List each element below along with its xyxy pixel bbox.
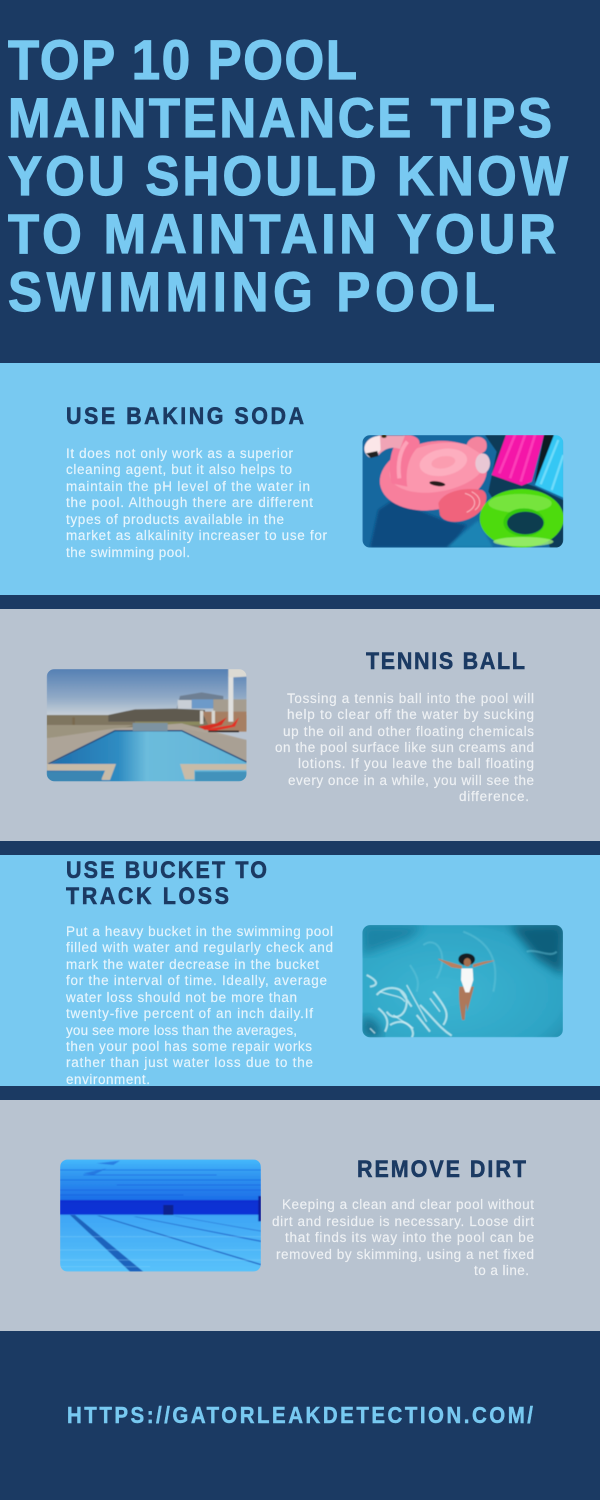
text block: bucket: filled with water and regularly check and — [66, 940, 333, 955]
text block: remove dirt: that finds its way into the pool can be — [285, 1230, 534, 1245]
text block: remove dirt: dirt and residue is necessary. Loose dirt — [272, 1214, 534, 1229]
text block: baking soda: the pool. Although there are different — [66, 495, 313, 510]
text block: bucket: twenty-five percent of an inch daily.If — [66, 1006, 313, 1021]
text block: tennis ball: help to clear off the water by sucking — [287, 707, 534, 722]
panel: remove dirt — [0, 1100, 600, 1331]
title: MAINTENANCE TIPS — [8, 87, 552, 150]
text block: bucket: you see more loss than the averages, — [66, 1023, 297, 1038]
text block: tennis ball: difference. — [459, 789, 529, 804]
text block: remove dirt: to a line. — [474, 1263, 529, 1278]
heading: use bucket to track loss: TRACK LOSS — [66, 882, 229, 909]
heading: use bucket to track loss: USE BUCKET TO — [66, 856, 267, 883]
website url: HTTPS://GATORLEAKDETECTION.COM/ — [67, 1402, 533, 1428]
text block: remove dirt — [272, 1197, 534, 1278]
text block: baking soda: the swimming pool. — [66, 545, 190, 560]
title: TO MAINTAIN YOUR — [8, 203, 556, 266]
text block: tennis ball: lotions. If you leave the ball floating — [298, 756, 534, 771]
text block: tennis ball: Tossing a tennis ball into the pool will — [287, 691, 534, 706]
heading: remove dirt: REMOVE DIRT — [357, 1155, 526, 1182]
text block: tennis ball: on the pool surface like sun creams and — [275, 740, 534, 755]
text block: tennis ball: up the oil and other floating chemicals — [283, 724, 534, 739]
panel: use baking soda — [0, 363, 600, 595]
text block: bucket: then your pool has some repair works — [66, 1039, 312, 1054]
heading: use bucket to track loss — [66, 856, 267, 909]
text block: remove dirt: removed by skimming, using a net fixed — [276, 1247, 534, 1262]
text block: bucket: Put a heavy bucket in the swimming pool — [66, 924, 333, 939]
panel: use bucket to track loss — [0, 855, 600, 1087]
heading: use baking soda: USE BAKING SODA — [66, 402, 304, 429]
text block: baking soda: maintain the pH level of the water in — [66, 479, 310, 494]
text block: bucket: rather than just water loss due to the — [66, 1055, 313, 1070]
image: woman floating in pool — [362, 925, 563, 1037]
text block: baking soda: market as alkalinity increaser to use for — [66, 528, 328, 543]
text block: bucket: mark the water decrease in the bucket — [66, 957, 319, 972]
image: pool floats — [362, 433, 564, 548]
image: backyard pool — [47, 669, 247, 782]
title: TOP 10 POOL — [8, 29, 357, 92]
text block: baking soda: cleaning agent, but it also helps to — [66, 462, 292, 477]
heading: tennis ball: TENNIS BALL — [366, 647, 525, 674]
text block: remove dirt: Keeping a clean and clear pool without — [282, 1197, 534, 1212]
text block: baking soda: It does not only work as a superior — [66, 446, 294, 461]
text block: tennis ball — [275, 691, 534, 804]
title: YOU SHOULD KNOW — [8, 145, 568, 208]
text block: baking soda — [66, 446, 328, 560]
text block: bucket: water loss should not be more than — [65, 990, 297, 1005]
panel: tennis ball — [0, 609, 600, 841]
text block: tennis ball: every once in a while, you will see the — [288, 773, 534, 788]
text block: bucket — [65, 924, 333, 1087]
text block: bucket: environment. — [66, 1072, 150, 1087]
text block: baking soda: types of products available in the — [66, 512, 284, 527]
image: underwater pool lanes — [60, 1159, 261, 1272]
title — [8, 29, 568, 324]
text block: bucket: for the interval of time. Ideally, average — [66, 973, 327, 988]
title: SWIMMING POOL — [8, 261, 495, 324]
